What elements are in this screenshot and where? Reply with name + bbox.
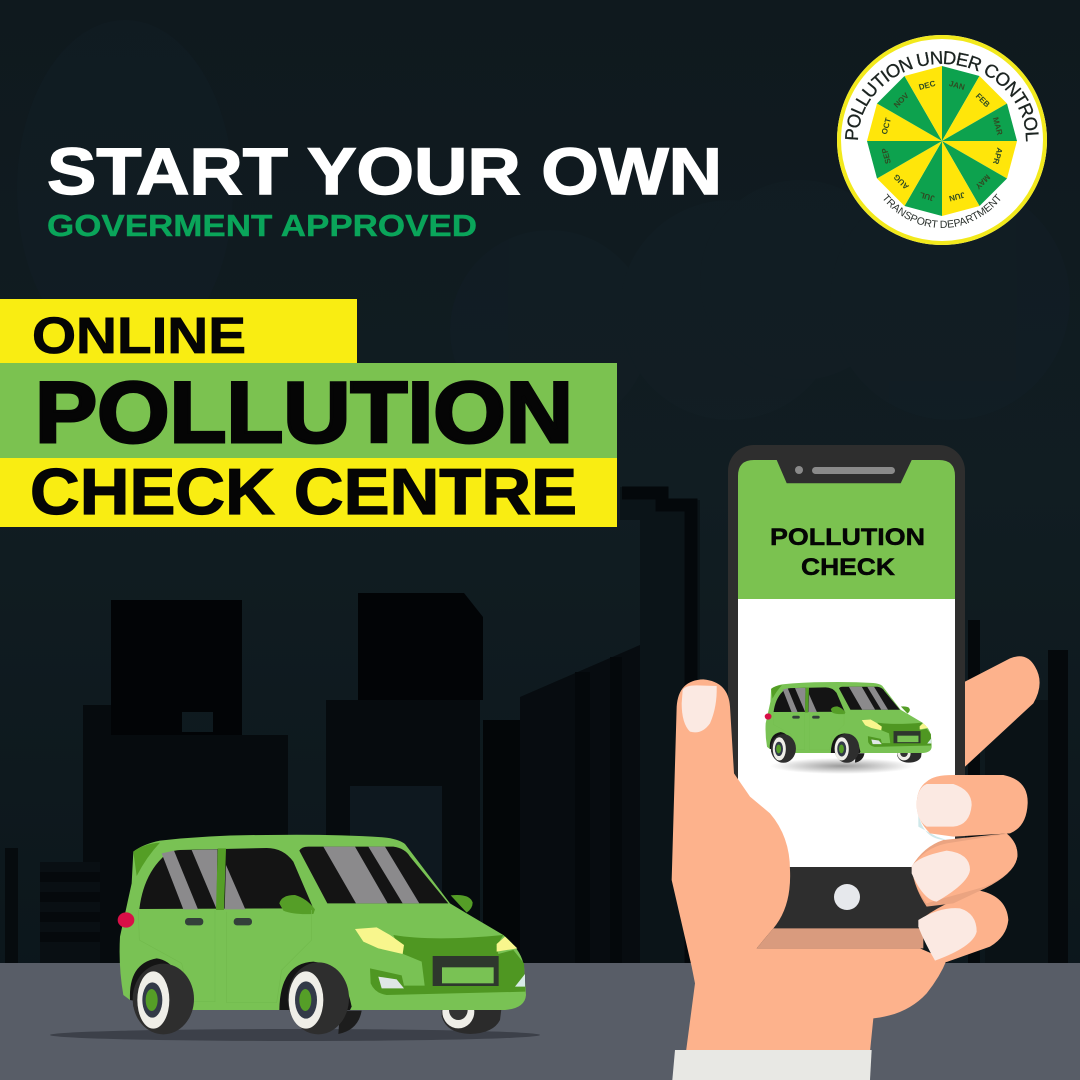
month labels: MAR — [991, 116, 1004, 136]
smog clouds — [17, 20, 1070, 430]
month labels: APR — [991, 147, 1004, 165]
month labels: SEP — [880, 146, 893, 165]
phone screen body — [738, 599, 955, 867]
subheading: GOVERMENT APPROVED — [47, 208, 477, 243]
banner: check centre: CHECK CENTRE — [30, 455, 577, 528]
month labels: JUN — [948, 190, 966, 203]
month labels: NOV — [892, 91, 911, 110]
phone heading — [770, 524, 925, 581]
ring finger — [912, 833, 1017, 907]
hand: back finger — [965, 656, 1040, 767]
month labels: DEC — [918, 79, 937, 92]
logo arc subtitle: TRANSPORT DEPARTMENT — [884, 194, 1000, 228]
hand — [672, 679, 1028, 1080]
middle finger — [917, 775, 1028, 840]
phone screen header — [738, 460, 955, 599]
phone shadow on hand — [757, 928, 923, 948]
city skyline — [5, 487, 1068, 963]
little finger — [918, 891, 1008, 962]
headline: START YOUR OWN — [47, 134, 722, 208]
banner: pollution: POLLUTION — [35, 365, 573, 461]
phone heading: POLLUTION — [770, 524, 925, 551]
home button — [834, 884, 860, 910]
phone car — [765, 682, 932, 763]
month labels: MAY — [973, 172, 992, 191]
lit building panel — [350, 786, 442, 963]
car — [118, 835, 526, 1034]
phone speaker — [812, 467, 895, 474]
month labels: JUL — [919, 190, 936, 203]
month labels: FEB — [974, 92, 992, 109]
month labels: AUG — [892, 172, 911, 191]
banner: online: ONLINE — [32, 307, 246, 364]
month labels: OCT — [880, 117, 893, 135]
thumb and palm — [672, 679, 947, 1052]
month labels: JAN — [948, 79, 966, 92]
phone camera — [795, 466, 803, 474]
phone car shadow — [770, 758, 914, 774]
banner: online — [0, 299, 357, 364]
month labels — [880, 79, 1004, 203]
shirt cuff — [672, 1050, 872, 1080]
logo badge — [837, 35, 1047, 245]
phone — [728, 445, 965, 935]
car shadow — [50, 1029, 540, 1041]
phone heading: CHECK — [801, 554, 895, 581]
road — [0, 963, 1080, 1080]
logo arc title: POLLUTION UNDER CONTROL — [845, 51, 1039, 142]
thumbnail — [682, 685, 717, 732]
wheel wedges — [867, 66, 1017, 216]
